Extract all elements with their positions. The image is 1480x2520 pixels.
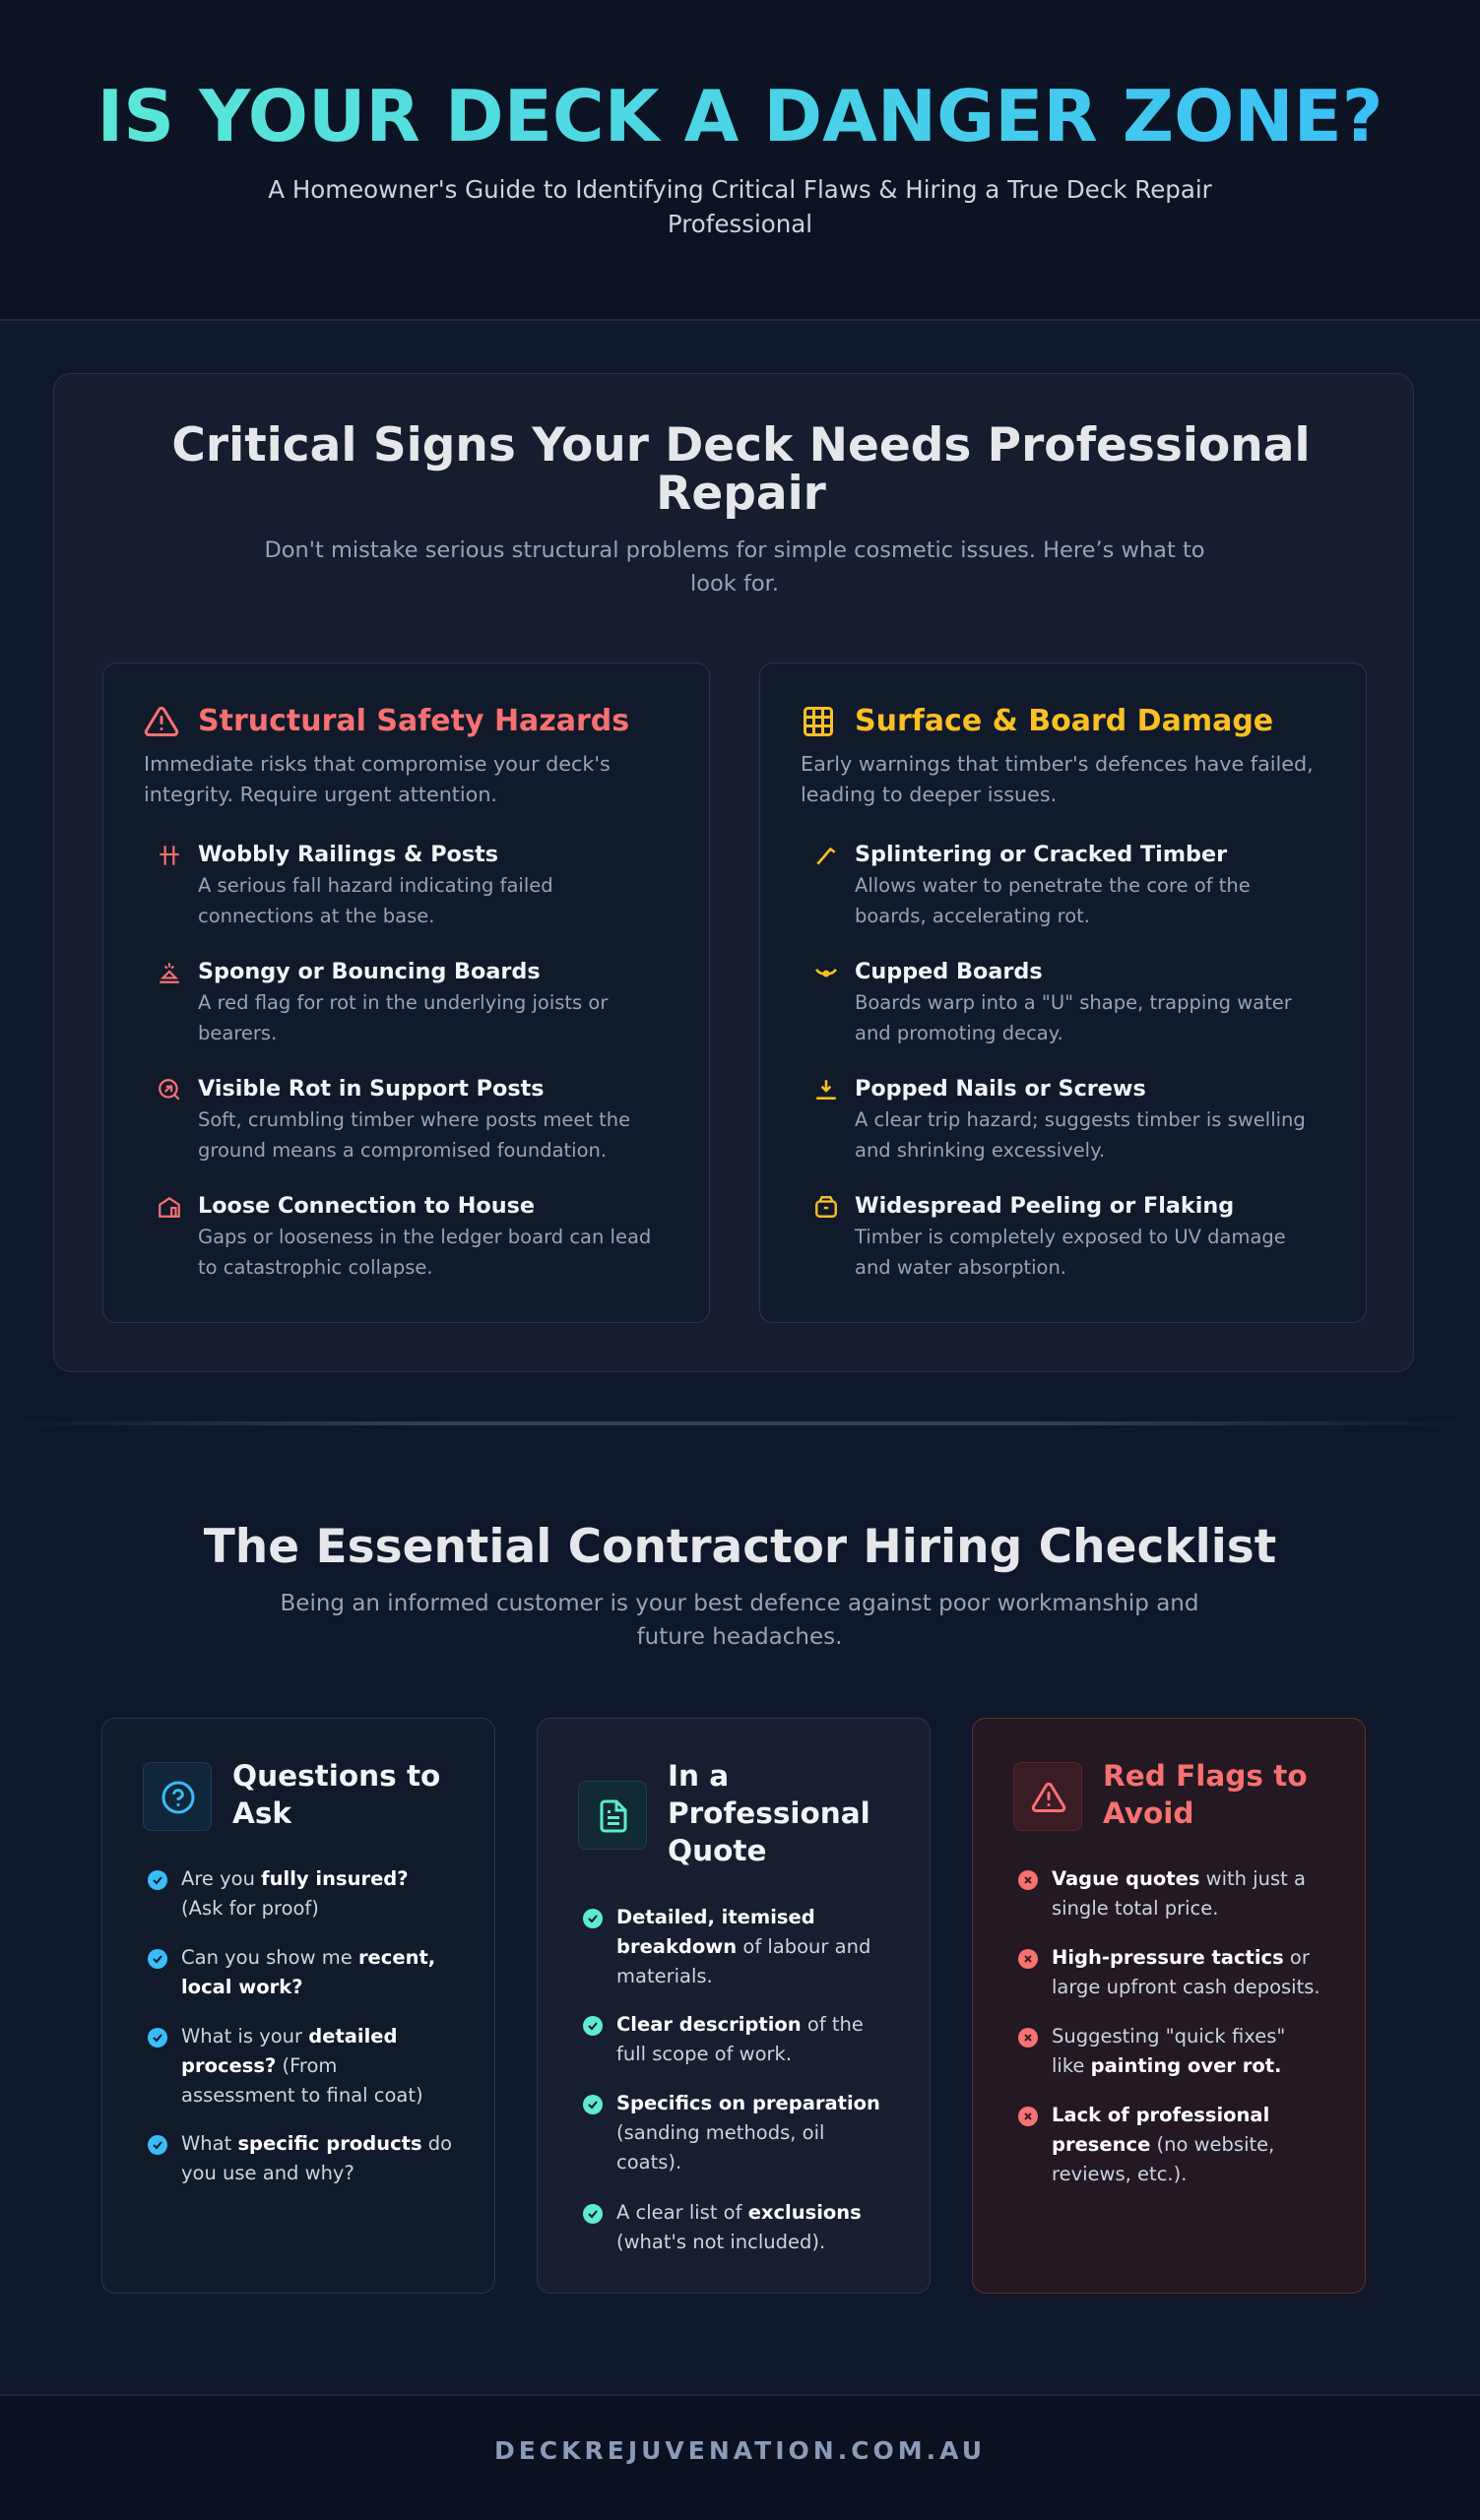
card: red flags: like painting over rot. bbox=[1052, 2054, 1281, 2077]
subtitle: A Homeowner's Guide to Identifying Critical Flaws & Hiring a True Deck Repair Professional bbox=[268, 175, 1212, 238]
card: professional quote: Clear description of the bbox=[616, 2013, 864, 2036]
item: cupped boards: Cupped Boards bbox=[855, 959, 1043, 984]
icon: grid bbox=[804, 707, 833, 736]
icon: warning bbox=[1013, 1762, 1082, 1831]
section subtitle: Being an informed customer is your best defence against poor workmanship and future headaches. bbox=[281, 1591, 1198, 1650]
icon: document bbox=[578, 1781, 647, 1850]
item: peeling: Timber is completely exposed to UV damage and water absorption. bbox=[855, 1226, 1286, 1279]
panel heading: Critical Signs Your Deck Needs Professional bbox=[171, 418, 1311, 472]
card: professional quote: coats). bbox=[616, 2151, 681, 2174]
card description: Immediate risks that compromise your deck's integrity. Require urgent attention. bbox=[144, 752, 611, 806]
item: splintering bbox=[816, 842, 1251, 927]
list: materials. bbox=[616, 1965, 713, 1987]
item: spongy boards: Spongy or Bouncing Boards bbox=[198, 959, 541, 984]
header bbox=[0, 0, 1480, 321]
item: splintering: Splintering or Cracked Timber bbox=[855, 842, 1227, 867]
item: wobbly railings bbox=[160, 842, 553, 927]
card: red flags: High-pressure tactics or bbox=[1052, 1946, 1310, 1969]
list: Detailed, itemised bbox=[616, 1906, 815, 1928]
list bbox=[1018, 1867, 1306, 1920]
footer text: DECKREJUVENATION.COM.AU bbox=[494, 2436, 986, 2465]
list: Are you fully insured? bbox=[181, 1867, 409, 1890]
list bbox=[583, 1906, 870, 1987]
card: questions to ask: process? (From bbox=[181, 2054, 337, 2077]
footer bbox=[0, 2394, 1480, 2520]
panel heading: Repair bbox=[656, 467, 826, 521]
card heading: Questions to bbox=[232, 1759, 440, 1793]
list: breakdown of labour and bbox=[616, 1935, 870, 1958]
item: cupped boards bbox=[815, 959, 1292, 1044]
item: loose connection: Gaps or looseness in the ledger board can lead to catastrophic collapse. bbox=[198, 1226, 651, 1279]
item: loose connection: Loose Connection to House bbox=[198, 1193, 535, 1219]
card heading: Structural Safety Hazards bbox=[198, 704, 629, 738]
card heading: Professional bbox=[668, 1796, 870, 1830]
list: single total price. bbox=[1052, 1897, 1218, 1920]
icon: warning bbox=[144, 707, 179, 736]
card heading: Quote bbox=[668, 1834, 766, 1867]
icon: question bbox=[143, 1762, 212, 1831]
card heading bbox=[232, 1759, 440, 1830]
card heading: In a bbox=[668, 1759, 729, 1793]
list: Vague quotes with just a bbox=[1052, 1867, 1306, 1890]
item: wobbly railings: A serious fall hazard indicating failed connections at the base. bbox=[198, 874, 553, 927]
section heading: checklist: The Essential Contractor Hiring Checklist bbox=[204, 1520, 1276, 1574]
card: professional quote: Specifics on preparation bbox=[616, 2092, 880, 2114]
item: spongy boards: A red flag for rot in the underlying joists or bearers. bbox=[198, 991, 608, 1044]
card: questions to ask: assessment to final coat) bbox=[181, 2084, 423, 2107]
card: structural safety hazards bbox=[102, 662, 710, 1323]
panel: critical signs bbox=[53, 373, 1414, 1372]
item: splintering: Allows water to penetrate the core of the boards, accelerating rot. bbox=[855, 874, 1251, 927]
item: peeling: Widespread Peeling or Flaking bbox=[855, 1193, 1234, 1219]
card: professional quote: A clear list of exclusions bbox=[616, 2201, 862, 2224]
card: questions to ask: Can you show me recent, bbox=[181, 1946, 435, 1969]
card: red flags: Suggesting "quick fixes" bbox=[1052, 2025, 1285, 2048]
card description: Early warnings that timber's defences have failed, leading to deeper issues. bbox=[801, 752, 1314, 806]
item: popped nails: A clear trip hazard; suggests timber is swelling and shrinking excessively. bbox=[855, 1108, 1306, 1162]
item: spongy boards bbox=[160, 959, 609, 1044]
list: (Ask for proof) bbox=[181, 1897, 319, 1920]
item: wobbly railings: Wobbly Railings & Posts bbox=[198, 842, 498, 867]
card: professional quote bbox=[537, 1718, 931, 2294]
item: loose connection bbox=[159, 1193, 651, 1279]
card: professional quote: (what's not included). bbox=[616, 2231, 825, 2253]
card: questions to ask: What specific products do bbox=[181, 2132, 452, 2155]
divider glow bbox=[0, 1421, 1480, 1425]
list bbox=[148, 1867, 409, 1920]
card heading: Red Flags to bbox=[1103, 1759, 1308, 1793]
panel subtitle: Don't mistake serious structural problems for simple cosmetic issues. Here’s what to look for. bbox=[264, 537, 1205, 597]
item: cupped boards: Boards warp into a "U" shape, trapping water and promoting decay. bbox=[855, 991, 1292, 1044]
card: questions to ask bbox=[101, 1718, 495, 2294]
item: visible rot: Visible Rot in Support Posts bbox=[198, 1076, 545, 1102]
item: popped nails: Popped Nails or Screws bbox=[855, 1076, 1146, 1102]
item: visible rot: Soft, crumbling timber where posts meet the ground means a compromised foundation. bbox=[198, 1108, 630, 1162]
card: questions to ask: What is your detailed bbox=[181, 2025, 397, 2048]
card: professional quote: full scope of work. bbox=[616, 2043, 792, 2065]
card: red flags: large upfront cash deposits. bbox=[1052, 1976, 1320, 1998]
item: peeling bbox=[815, 1193, 1286, 1279]
card: surface & board damage bbox=[759, 662, 1367, 1323]
card heading: Surface & Board Damage bbox=[855, 704, 1273, 738]
panel heading bbox=[171, 418, 1311, 521]
card: red flags: Lack of professional bbox=[1052, 2104, 1269, 2126]
card: red flags bbox=[972, 1718, 1366, 2294]
item: visible rot bbox=[159, 1076, 630, 1162]
card: red flags: reviews, etc.). bbox=[1052, 2163, 1187, 2185]
card heading bbox=[668, 1759, 870, 1867]
card heading bbox=[1103, 1759, 1308, 1830]
item: popped nails bbox=[816, 1076, 1306, 1162]
card heading: Avoid bbox=[1103, 1796, 1194, 1830]
card: questions to ask: local work? bbox=[181, 1976, 303, 1998]
card heading: Ask bbox=[232, 1796, 291, 1830]
title: IS YOUR DECK A DANGER ZONE? bbox=[97, 75, 1383, 158]
card: questions to ask: you use and why? bbox=[181, 2162, 354, 2184]
card: professional quote: (sanding methods, oil bbox=[616, 2121, 824, 2144]
card: red flags: presence (no website, bbox=[1052, 2133, 1274, 2156]
